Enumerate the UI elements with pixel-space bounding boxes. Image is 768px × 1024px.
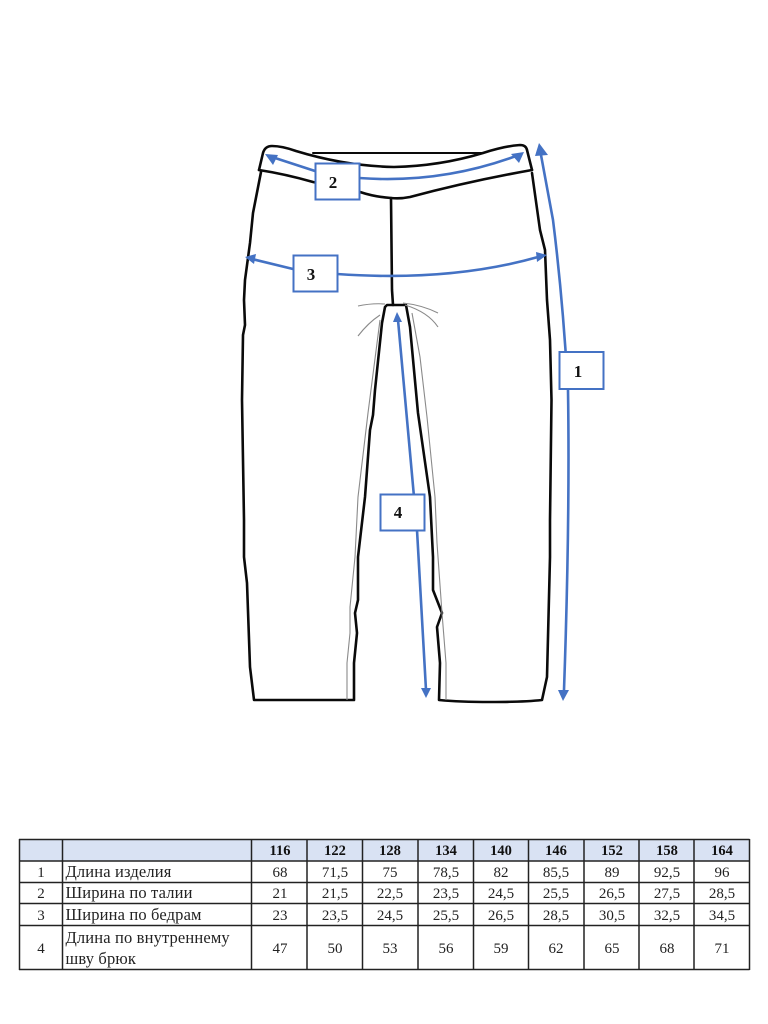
row 3: hip width: Ширина по бедрам <box>66 905 202 924</box>
row 4: inseam length: 62 <box>548 941 564 957</box>
table header sizes: 146 <box>545 843 567 859</box>
row 3: hip width: 23,5 <box>322 908 348 924</box>
row 3: hip width: 30,5 <box>599 908 625 924</box>
label box 3: 3 <box>307 265 315 284</box>
arrow 1: total length <box>535 143 569 701</box>
row 4: inseam length: 47 <box>272 941 288 957</box>
row 1: product length: 92,5 <box>654 865 680 881</box>
row 4: inseam length: 50 <box>328 941 342 957</box>
arrow 4: inseam length <box>393 312 431 698</box>
label box 1 <box>560 352 604 389</box>
row 2: waist width: Ширина по талии <box>66 883 193 902</box>
row 1: product length <box>37 862 730 881</box>
size table <box>19 839 750 970</box>
row 3: hip width: 24,5 <box>377 908 403 924</box>
row 4: inseam length: шву брюк <box>66 949 137 968</box>
row 1: product length: 68 <box>272 865 288 881</box>
row 2: waist width: 23,5 <box>433 886 459 902</box>
label box 3 <box>294 256 338 292</box>
arrow 3: hip width <box>245 252 547 276</box>
row 4: inseam length: 56 <box>438 941 454 957</box>
row 1: product length: Длина изделия <box>66 862 172 881</box>
row 4: inseam length <box>37 928 730 968</box>
row 2: waist width: 28,5 <box>709 886 735 902</box>
row 4: inseam length: Длина по внутреннему <box>66 928 230 947</box>
row 3: hip width: 3 <box>37 908 45 924</box>
row 2: waist width <box>37 883 735 902</box>
row 2: waist width: 22,5 <box>377 886 403 902</box>
table header sizes: 158 <box>656 843 678 859</box>
row 1: product length: 85,5 <box>543 865 569 881</box>
row 1: product length: 82 <box>494 865 508 881</box>
label box 1: 1 <box>574 362 582 381</box>
label box 2 <box>316 164 360 200</box>
row 1: product length: 78,5 <box>433 865 459 881</box>
row 3: hip width: 26,5 <box>488 908 514 924</box>
row 1: product length: 71,5 <box>322 865 348 881</box>
row 2: waist width: 26,5 <box>599 886 625 902</box>
row 3: hip width: 34,5 <box>709 908 735 924</box>
row 4: inseam length: 65 <box>604 941 620 957</box>
arrow 2: waist width <box>265 152 524 179</box>
table header sizes: 116 <box>270 843 290 859</box>
inseam stitching and crotch wrinkles <box>347 303 446 700</box>
row 3: hip width: 23 <box>272 908 288 924</box>
label box 2: 2 <box>329 173 337 192</box>
table header sizes: 152 <box>601 843 623 859</box>
row 2: waist width: 24,5 <box>488 886 514 902</box>
row 2: waist width: 21,5 <box>322 886 348 902</box>
row 4: inseam length: 68 <box>660 941 674 957</box>
row 2: waist width: 25,5 <box>543 886 569 902</box>
row 1: product length: 1 <box>37 865 45 881</box>
row 4: inseam length: 59 <box>494 941 508 957</box>
table header sizes <box>270 843 733 859</box>
label box 4 <box>380 494 424 530</box>
row 4: inseam length: 4 <box>37 941 45 957</box>
row 3: hip width <box>37 905 735 924</box>
table header sizes: 134 <box>435 843 457 859</box>
table grid <box>19 839 750 970</box>
row 3: hip width: 28,5 <box>543 908 569 924</box>
row 1: product length: 75 <box>382 865 398 881</box>
table header sizes: 128 <box>379 843 401 859</box>
row 2: waist width: 21 <box>272 886 288 902</box>
table header sizes: 140 <box>490 843 512 859</box>
row 4: inseam length: 71 <box>714 941 730 957</box>
table header background <box>19 839 749 861</box>
table header sizes: 164 <box>711 843 733 859</box>
row 3: hip width: 25,5 <box>433 908 459 924</box>
row 1: product length: 89 <box>604 865 620 881</box>
row 3: hip width: 32,5 <box>654 908 680 924</box>
table header sizes: 122 <box>324 843 346 859</box>
row 4: inseam length: 53 <box>382 941 398 957</box>
row 1: product length: 96 <box>714 865 730 881</box>
row 2: waist width: 2 <box>37 886 45 902</box>
row 2: waist width: 27,5 <box>654 886 680 902</box>
pants outline drawing <box>242 145 552 702</box>
label box 4: 4 <box>394 503 403 522</box>
